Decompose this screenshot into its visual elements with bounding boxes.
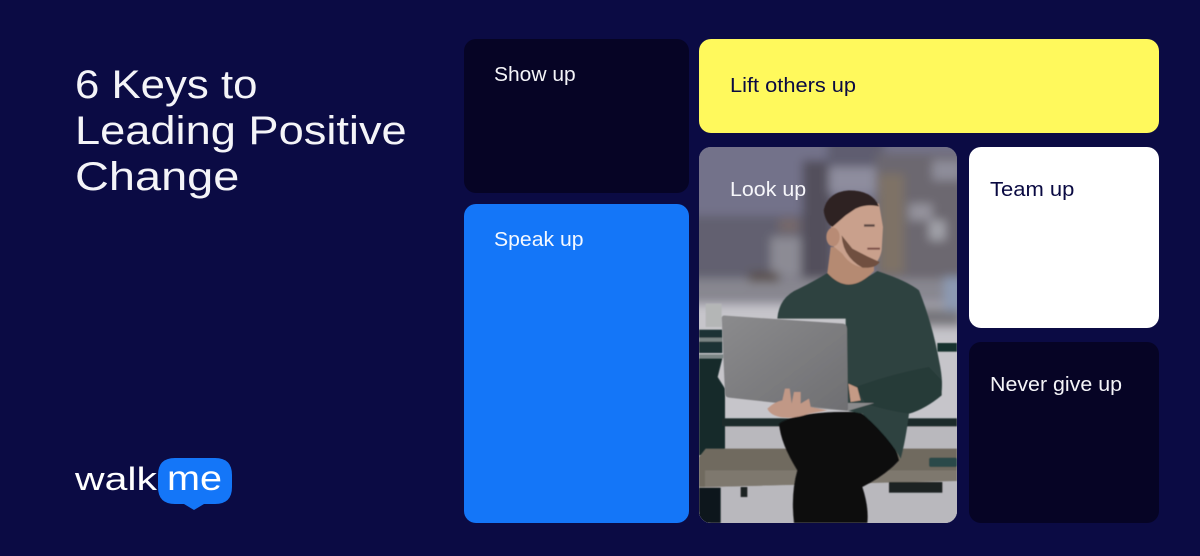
panel: Lift others up — [699, 39, 1159, 133]
hand holding laptop — [767, 389, 827, 418]
logo: WalkMe: walk — [74, 461, 158, 497]
sky — [699, 147, 957, 523]
panel: Team up — [969, 147, 1159, 328]
hair — [824, 190, 879, 227]
eye and mouth — [864, 224, 875, 227]
blurred city and water — [689, 137, 966, 537]
panel: Speak up — [464, 204, 689, 523]
head — [830, 204, 883, 268]
panel: Look up photo — [699, 147, 957, 523]
bench — [699, 449, 957, 523]
label: Speak up: Speak up — [494, 229, 584, 251]
sweater — [777, 271, 942, 459]
panel: Never give up — [969, 342, 1159, 523]
laptop base — [774, 403, 874, 411]
laptop lid — [722, 316, 848, 410]
title: Leading Positive — [75, 109, 407, 153]
neck — [827, 247, 874, 285]
label: Team up: Team up — [990, 179, 1074, 201]
man — [722, 190, 942, 523]
title: 6 Keys to — [75, 63, 257, 107]
panel: Show up — [464, 39, 689, 193]
legs — [779, 412, 899, 523]
label: Lift others up: Lift others up — [730, 75, 856, 97]
photo: man with laptop on bench — [699, 147, 957, 523]
title: Change — [75, 155, 239, 199]
railing and post — [699, 304, 957, 455]
label: Never give up: Never give up — [990, 374, 1122, 396]
title — [75, 63, 407, 199]
logo: WalkMe — [74, 458, 232, 510]
ear — [826, 228, 840, 246]
logo: WalkMe: me — [167, 459, 222, 498]
beard — [842, 235, 880, 268]
hand at keyboard — [848, 384, 861, 402]
label: Look up: Look up — [730, 179, 806, 201]
label: Show up: Show up — [494, 64, 576, 86]
